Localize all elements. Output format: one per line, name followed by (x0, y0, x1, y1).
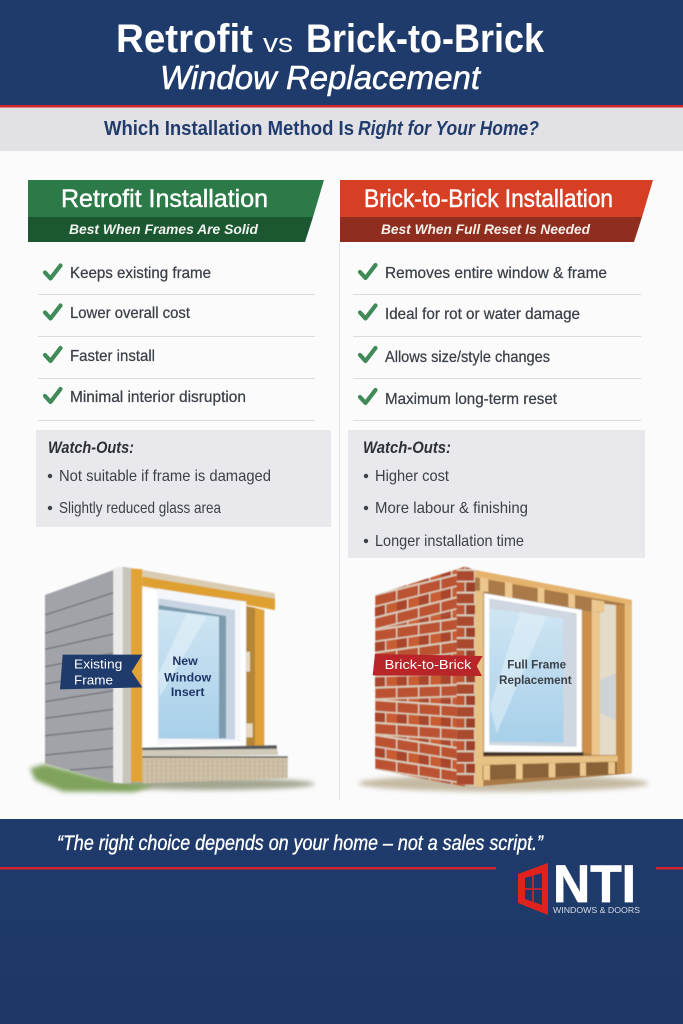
callout: existing frame: Frame (74, 672, 113, 687)
logo: NTI windows and doors: NTI (553, 855, 636, 914)
brick-to-brick benefits list (353, 265, 641, 420)
subheading band: Which Installation Method Is (104, 118, 354, 140)
illustration: brick-to-brick wall section (358, 567, 648, 792)
panel: retrofit banner: Best When Frames Are Solid (69, 221, 258, 237)
callout: existing frame: Existing (74, 657, 122, 672)
label: new window insert (164, 654, 212, 699)
callout: brick-to-brick: Brick-to-Brick (385, 658, 472, 672)
label: new window insert: Insert (171, 685, 204, 699)
brick-to-brick benefits list: Allows size/style changes (385, 349, 550, 366)
panel: brick-to-brick watch-outs: Watch-Outs: (363, 438, 451, 457)
header band (0, 0, 683, 108)
panel: retrofit watch-outs: Slightly reduced glass area (59, 500, 221, 517)
panel: brick-to-brick banner: Brick-to-Brick Installation (364, 185, 613, 213)
retrofit benefits list: Minimal interior disruption (70, 389, 246, 406)
panel: retrofit watch-outs (36, 430, 331, 527)
panel: brick-to-brick banner: Best When Full Reset Is Needed (381, 221, 590, 237)
retrofit benefits list: Faster install (70, 348, 155, 365)
panel: brick-to-brick watch-outs (348, 430, 645, 558)
brick-to-brick benefits list: Maximum long-term reset (385, 391, 558, 408)
label: full frame replacement: Full Frame (507, 659, 567, 672)
callout: brick-to-brick (373, 654, 483, 676)
panel: retrofit watch-outs: Watch-Outs: (48, 438, 134, 457)
centre divider (339, 242, 340, 800)
retrofit benefits list (38, 265, 315, 420)
label: full frame replacement (499, 659, 572, 687)
label: full frame replacement: Replacement (499, 674, 572, 687)
retrofit benefits list: Lower overall cost (70, 305, 191, 322)
panel: retrofit banner (28, 180, 324, 242)
title: Retrofit (116, 17, 253, 61)
panel: brick-to-brick watch-outs: More labour & finishing (375, 500, 528, 517)
logo: NTI windows and doors (518, 855, 640, 915)
panel: brick-to-brick banner (340, 180, 653, 242)
quote: “The right choice depends on your home – not a sales script.” (57, 832, 544, 855)
title: vs (263, 28, 293, 58)
footer band (0, 819, 683, 1024)
illustration: retrofit wall section (30, 567, 315, 792)
panel: brick-to-brick watch-outs: Longer installation time (375, 533, 524, 550)
label: new window insert: New (172, 654, 198, 668)
brick-to-brick benefits list: Removes entire window & frame (385, 265, 607, 282)
callout: existing frame (60, 655, 142, 689)
subheading band: Right for Your Home? (358, 118, 539, 140)
title (116, 17, 545, 96)
title: Window Replacement (160, 59, 482, 96)
panel: retrofit banner: Retrofit Installation (61, 185, 268, 213)
retrofit benefits list: Keeps existing frame (70, 265, 211, 282)
subheading band (0, 108, 683, 151)
panel: retrofit watch-outs: Not suitable if frame is damaged (59, 468, 271, 485)
brick-to-brick benefits list: Ideal for rot or water damage (385, 306, 580, 323)
label: new window insert: Window (164, 671, 212, 685)
panel: brick-to-brick watch-outs: Higher cost (375, 468, 450, 485)
title: Brick-to-Brick (306, 17, 545, 61)
logo: NTI windows and doors: WINDOWS & DOORS (553, 905, 640, 915)
